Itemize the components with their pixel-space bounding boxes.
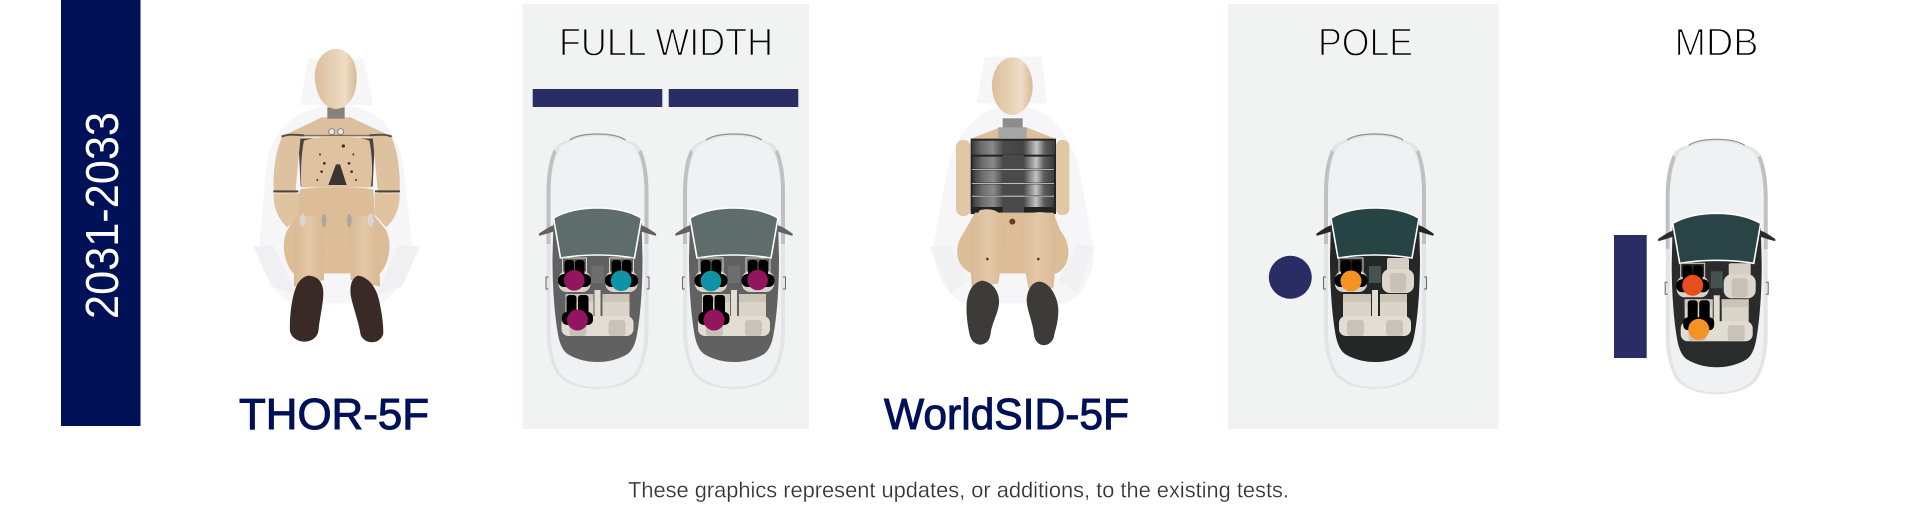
WorldSID-5F label: WorldSID-5F [884,390,1129,439]
THOR-5F label: THOR-5F [239,390,429,439]
barrier: left half [533,89,662,107]
pole impactor [1269,256,1312,299]
car: MDB [1659,139,1775,394]
car: pole [1317,134,1433,389]
WorldSID-5F dummy [930,57,1095,345]
panel: full width test [522,4,809,429]
heading: full width: FULL WIDTH [559,22,773,64]
MDB barrier [1614,235,1647,358]
caption: These graphics represent updates, or additions, to the existing tests. [628,478,1289,502]
barrier: right half [669,89,798,107]
heading: MDB: MDB [1674,22,1758,64]
panel: pole test [1228,4,1498,429]
year label: 2031-2033 [76,112,128,319]
car: full width right [676,134,792,389]
car: full width left [540,134,656,389]
THOR-5F dummy [253,49,420,342]
heading: pole: POLE [1318,22,1413,64]
year band [61,0,140,426]
